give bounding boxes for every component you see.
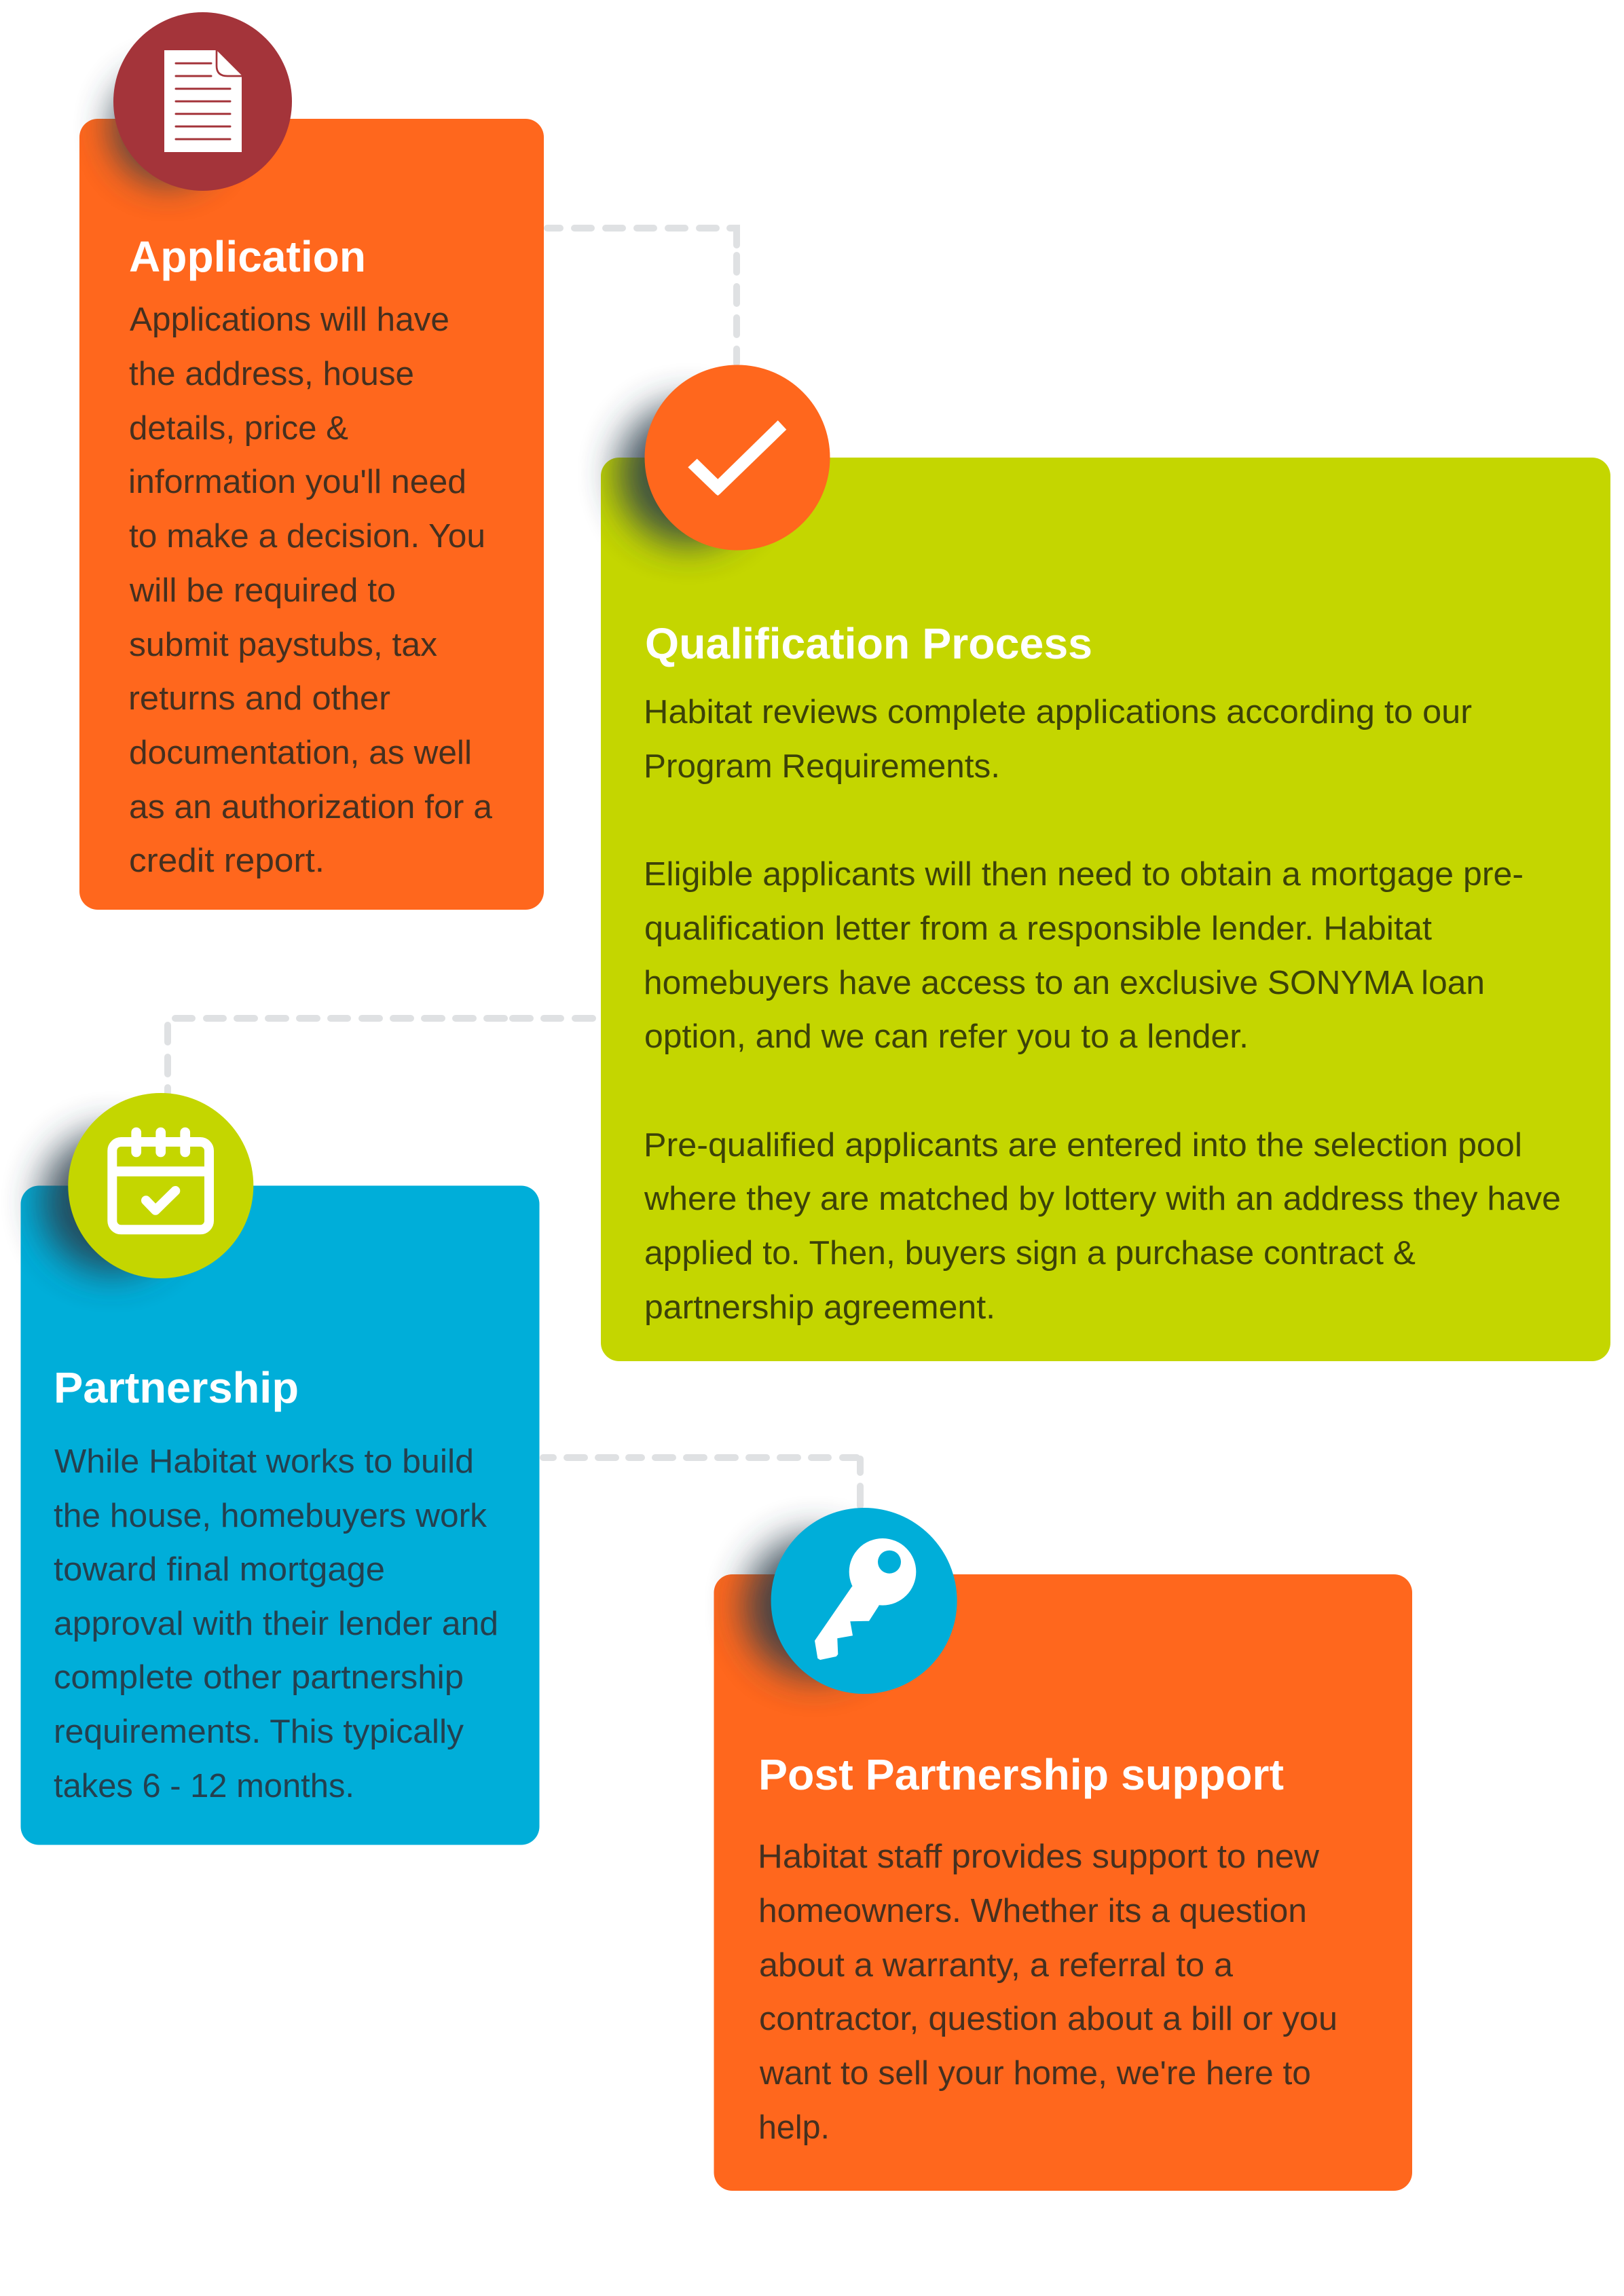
text block: Application description (128, 301, 492, 879)
arrow: dashed connector from Qualification Process to Partnership (168, 1018, 593, 1094)
text block: Post Partnership description: homeowners. Whether its a question (758, 1892, 1307, 1929)
icon: calendar badge (41, 1093, 253, 1278)
text block: Qualification description: option, and we can refer you to a lender. (644, 1018, 1249, 1055)
text block: Qualification description: where they are matched by lottery with an address they have (644, 1180, 1561, 1217)
text block: Qualification description: Pre-qualified applicants are entered into the selection pool (644, 1126, 1522, 1164)
text block: Post Partnership description: help. (758, 2109, 830, 2146)
panel: Partnership (20, 1093, 539, 1845)
text block: Application description: credit report. (129, 842, 325, 879)
text block: Application description: submit paystubs, tax (129, 626, 437, 663)
text block: Application description: returns and other (128, 680, 390, 717)
text block: Post Partnership description: contractor, question about a bill or you (759, 2000, 1337, 2037)
panel: Qualification Process (601, 365, 1610, 1361)
text block: Qualification description: partnership agreement. (644, 1289, 995, 1326)
text block: Application description: the address, house (129, 355, 414, 392)
arrow: dashed connector from Partnership to Post Partnership support (543, 1458, 860, 1506)
text block: Post Partnership description: Habitat staff provides support to new (758, 1838, 1319, 1875)
text block: Application description: to make a decision. You (129, 517, 485, 555)
text block: Qualification description: Habitat reviews complete applications according to our (644, 693, 1472, 730)
icon: document badge (109, 12, 292, 191)
heading: Partnership: Partnership (54, 1363, 299, 1412)
arrow: dashed connector from Application to Qualification Process (547, 228, 737, 363)
text block: Partnership description: While Habitat works to build (54, 1443, 474, 1480)
text block: Partnership description: toward final mortgage (54, 1551, 385, 1588)
text block: Application description: details, price & (129, 409, 348, 447)
text block: Partnership description (54, 1443, 498, 1804)
text block: Qualification description: Program Requirements. (644, 747, 1000, 785)
text block: Partnership description: requirements. This typically (54, 1713, 464, 1750)
heading: Post Partnership support: Post Partnership support (758, 1750, 1284, 1799)
text block: Qualification description: homebuyers have access to an exclusive SONYMA loan (644, 964, 1485, 1001)
text block: Application description: as an authorization for a (129, 788, 492, 826)
panel: Application (79, 12, 544, 910)
text block: Post Partnership description (758, 1838, 1337, 2146)
text block: Application description: information you'll need (128, 463, 466, 500)
text block: Post Partnership description: want to sell your home, we're here to (759, 2054, 1311, 2092)
text block: Partnership description: the house, homebuyers work (54, 1497, 487, 1534)
text block: Partnership description: complete other partnership (54, 1659, 464, 1696)
text block: Application description: documentation, as well (129, 734, 472, 771)
icon: check mark badge (618, 365, 830, 550)
heading: Application: Application (129, 232, 366, 281)
text block: Qualification description: qualification letter from a responsible lender. Habitat (644, 910, 1432, 947)
text block: Partnership description: takes 6 - 12 months. (54, 1767, 354, 1804)
text block: Application description: Applications will have (130, 301, 449, 338)
text block: Post Partnership description: about a warranty, a referral to a (759, 1946, 1233, 1984)
text block: Application description: will be required to (129, 572, 396, 609)
text block: Qualification description (644, 693, 1561, 1326)
panel: Post Partnership support (714, 1508, 1412, 2191)
text block: Qualification description: applied to. Then, buyers sign a purchase contract & (644, 1234, 1416, 1272)
text block: Partnership description: approval with their lender and (54, 1605, 498, 1642)
text block: Qualification description: Eligible applicants will then need to obtain a mortgage pre- (644, 855, 1524, 893)
heading: Qualification Process: Qualification Process (645, 619, 1092, 668)
icon: key badge (745, 1508, 957, 1694)
